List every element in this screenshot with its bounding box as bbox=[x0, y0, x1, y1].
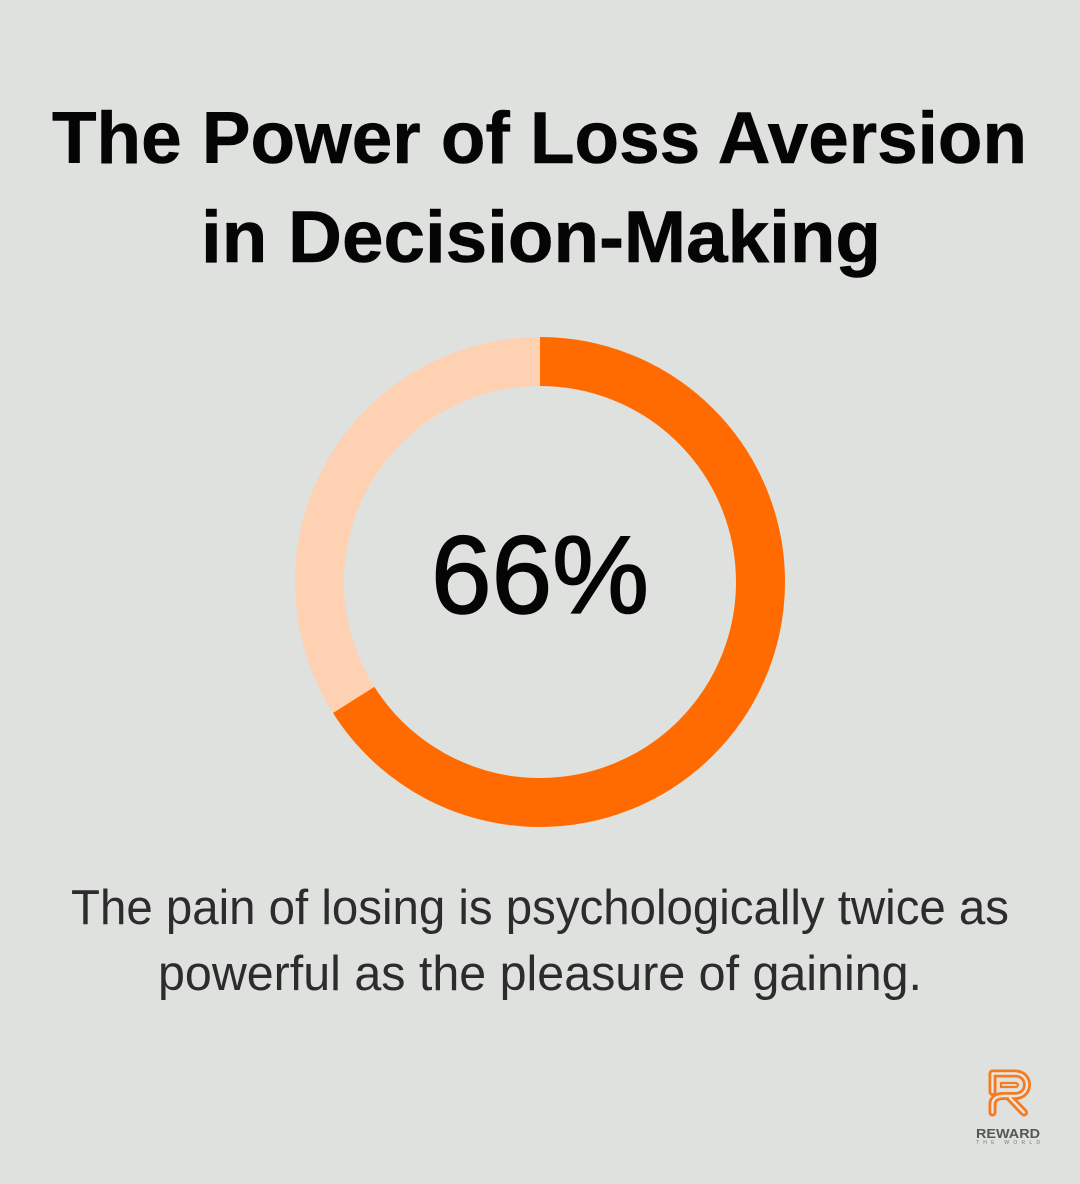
tagline: THE WORLD bbox=[976, 1140, 1040, 1146]
wordmark: REWARD bbox=[976, 1126, 1040, 1141]
donut value: 66% bbox=[431, 514, 649, 637]
title: in Decision-Making bbox=[201, 197, 881, 278]
donut chart: 66% bbox=[320, 362, 760, 802]
description text: powerful as the pleasure of gaining. bbox=[158, 947, 922, 1001]
icon: R mark bbox=[992, 1074, 1027, 1112]
logo: Reward the World bbox=[976, 1074, 1040, 1146]
description text: The pain of losing is psychologically twice as bbox=[71, 881, 1009, 935]
title bbox=[52, 98, 1027, 278]
title: The Power of Loss Aversion bbox=[52, 98, 1027, 179]
description text bbox=[71, 881, 1009, 1001]
